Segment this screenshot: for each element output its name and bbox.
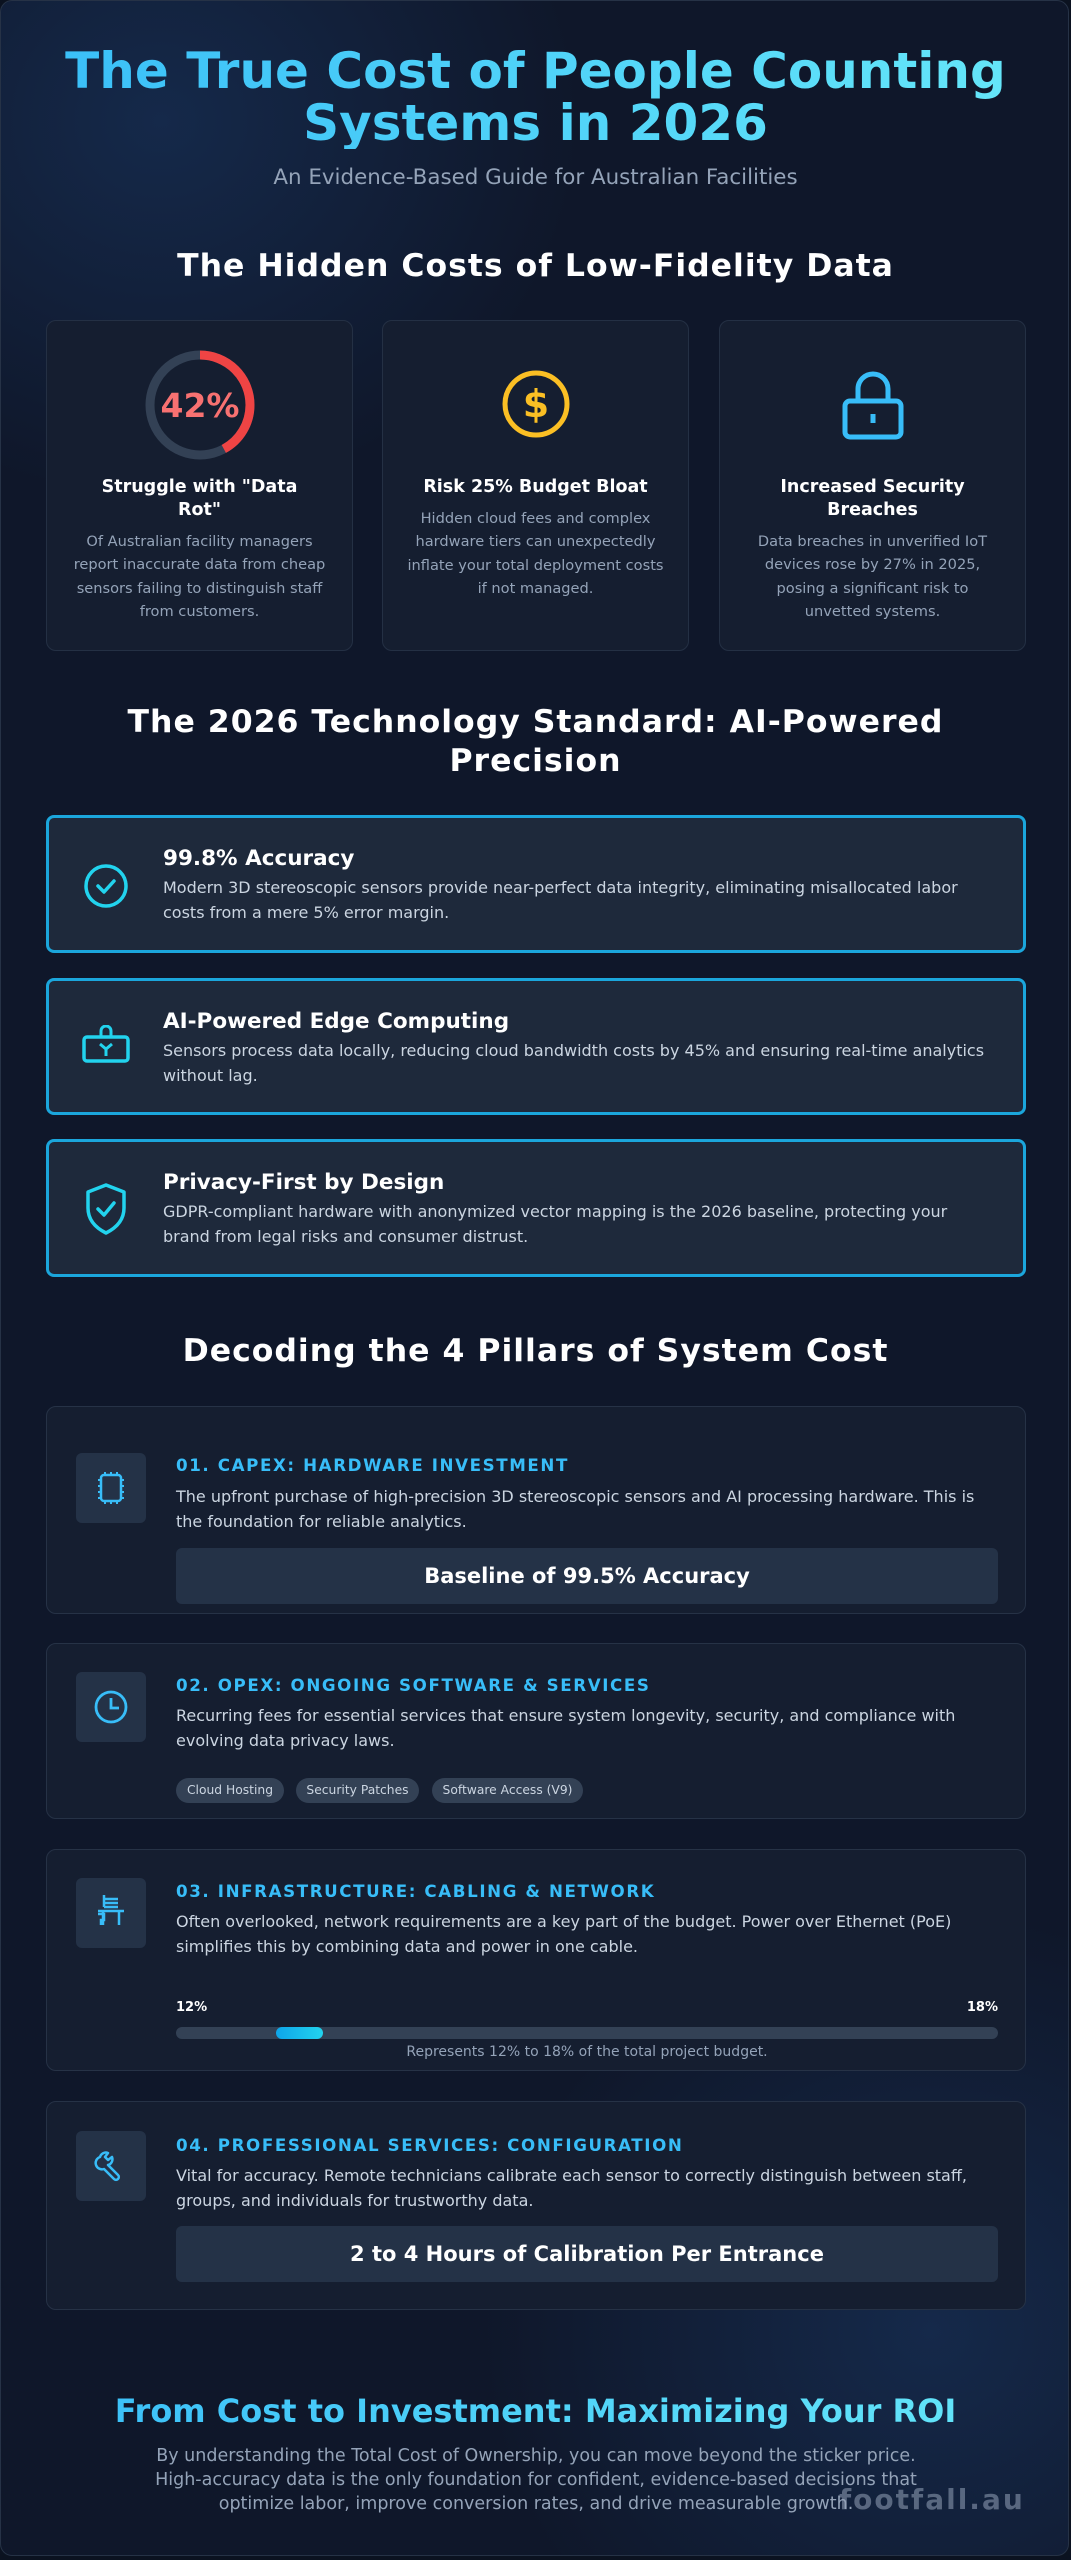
icon: clock [76,1672,146,1742]
card text: Data breaches in unverified IoT devices rose by 27% in 2025, posing a significant risk to unvetted systems. [758,533,987,620]
pillar label: 02. OPEX: ONGOING SOFTWARE & SERVICES [176,1675,650,1695]
panel: opex [46,1643,1026,1819]
feature title: 99.8% Accuracy [163,846,354,871]
heading: pillars: Decoding the 4 Pillars of System Cost [183,1333,888,1369]
feature title: Privacy-First by Design [163,1170,444,1195]
card title: Increased Security Breaches [780,477,965,520]
heading: technology standard: The 2026 Technology Standard: AI-Powered [128,704,943,740]
title: Systems in 2026 [303,94,768,152]
highlight box [176,2226,998,2282]
pillar text: Often overlooked, network requirements are a key part of the budget. Power over Ethernet (PoE) simplifies this by combining data and power in one cable. [176,1912,951,1956]
icon: 42% ring: 42% [160,386,240,425]
footer text: By understanding the Total Cost of Ownership, you can move beyond the sticker price. High-accuracy data is the only foundation for confident, evidence-based decisions that optimize labor, improve conversion rates, and drive measurable growth. [155,2446,917,2514]
range bar: 18% [967,2000,998,2015]
icon: wrench [76,2131,146,2201]
icon: shield [86,1183,126,1235]
subtitle: An Evidence-Based Guide for Australian Facilities [273,165,798,190]
feature text: Modern 3D stereoscopic sensors provide near-perfect data integrity, eliminating misallocated labor costs from a mere 5% error margin. [163,878,958,922]
icon: dollar: $ [523,382,549,426]
pillar label: 04. PROFESSIONAL SERVICES: CONFIGURATION [176,2135,683,2155]
range bar [176,2000,998,2060]
panel: edge computing [46,978,1026,1115]
card text: Of Australian facility managers report inaccurate data from cheap sensors failing to distinguish staff from customers. [74,533,325,620]
pillar text: The upfront purchase of high-precision 3D stereoscopic sensors and AI processing hardware. This is the foundation for reliable analytics. [176,1487,974,1531]
pillar label: 03. INFRASTRUCTURE: CABLING & NETWORK [176,1881,655,1901]
watermark: footfall.au [839,2483,1025,2516]
panel: privacy [46,1139,1026,1277]
panel: professional services [46,2101,1026,2310]
title: The True Cost of People Counting [65,42,1006,100]
feature title: AI-Powered Edge Computing [163,1009,509,1034]
tags: Software Access (V9) [443,1783,572,1797]
heading: technology standard: Precision [449,743,622,779]
highlight box [176,1548,998,1604]
heading: hidden costs: The Hidden Costs of Low-Fidelity Data [177,248,894,284]
panel: data rot [46,320,353,651]
feature text: Sensors process data locally, reducing cloud bandwidth costs by 45% and ensuring real-time analytics without lag. [163,1041,984,1085]
icon: lock [842,372,904,440]
panel: infrastructure [46,1849,1026,2071]
pillar text: Vital for accuracy. Remote technicians calibrate each sensor to correctly distinguish between staff, groups, and individuals for trustworthy data. [176,2166,967,2210]
title [1,45,1070,149]
icon: network [76,1878,146,1948]
range bar: Represents 12% to 18% of the total project budget. [406,2044,768,2060]
footer heading: From Cost to Investment: Maximizing Your ROI [115,2392,956,2430]
tags [176,1778,583,1803]
feature text: GDPR-compliant hardware with anonymized vector mapping is the 2026 baseline, protecting your brand from legal risks and consumer distrust. [163,1202,947,1246]
pillar text: Recurring fees for essential services that ensure system longevity, security, and compliance with evolving data privacy laws. [176,1706,955,1750]
card title: Struggle with "Data Rot" [102,477,297,520]
panel: capex [46,1406,1026,1614]
icon: check circle [84,864,128,908]
panel: budget bloat [382,320,689,651]
heading: technology standard [128,704,943,779]
range bar: 12% [176,2000,207,2015]
pillar label: 01. CAPEX: HARDWARE INVESTMENT [176,1455,569,1475]
icon: edge device [82,1025,130,1063]
tags: Security Patches [306,1783,409,1797]
icon: dollar [502,370,570,438]
panel: accuracy [46,815,1026,953]
icon: chip [76,1453,146,1523]
card title: Risk 25% Budget Bloat [423,477,648,497]
highlight box: 2 to 4 Hours of Calibration Per Entrance [350,2242,824,2266]
card text: Hidden cloud fees and complex hardware tiers can unexpectedly inflate your total deployment costs if not managed. [407,510,664,597]
icon: 42% ring [146,350,254,460]
panel: security [719,320,1026,651]
highlight box: Baseline of 99.5% Accuracy [424,1564,750,1588]
tags: Cloud Hosting [187,1783,273,1797]
